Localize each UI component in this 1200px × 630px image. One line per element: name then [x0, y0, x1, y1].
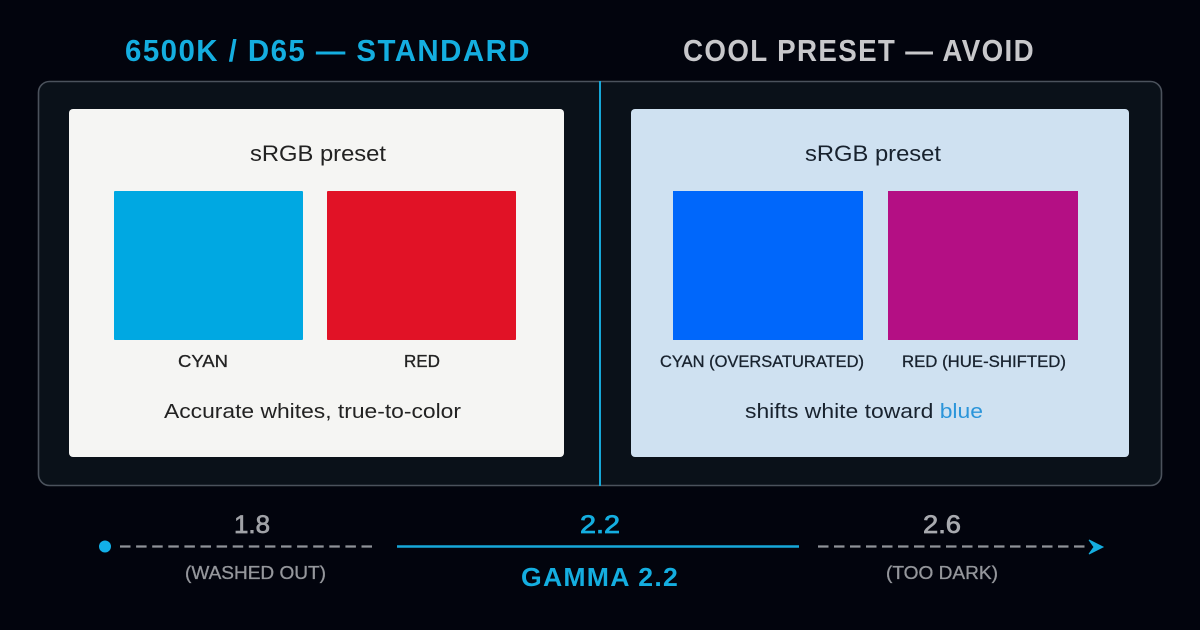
swatch: red — [327, 191, 516, 340]
value: 2.6: 2.6 — [923, 511, 961, 539]
panel: cool preset — [631, 109, 1129, 457]
label: gamma 2.2: GAMMA 2.2 — [521, 562, 679, 592]
label: cyan oversaturated: CYAN (OVERSATURATED) — [660, 352, 864, 371]
value: 1.8: 1.8 — [234, 511, 270, 539]
arrowhead — [1089, 540, 1103, 554]
center divider — [599, 81, 601, 486]
card heading: sRGB preset: sRGB preset — [805, 141, 942, 166]
title: cool preset avoid: COOL PRESET — AVOID — [683, 34, 1035, 68]
title: 6500K standard: 6500K / D65 — STANDARD — [125, 34, 531, 68]
panel: standard — [69, 109, 564, 457]
gamma scale — [99, 511, 1103, 592]
start dot — [99, 540, 111, 552]
comparison frame — [38, 82, 1162, 486]
swatch: oversaturated cyan — [673, 191, 863, 340]
swatch: hue-shifted red — [888, 191, 1078, 340]
solid line: gamma 2.2 — [397, 545, 799, 548]
note: too dark: (TOO DARK) — [886, 562, 998, 583]
label: red hue-shifted: RED (HUE-SHIFTED) — [902, 352, 1066, 371]
dashed line: low gamma — [120, 545, 372, 548]
caption: shifts white toward blue: shifts white toward blue — [745, 401, 983, 423]
label: red: RED — [404, 351, 440, 371]
caption: accurate whites: Accurate whites, true-to-color — [164, 401, 461, 423]
swatch: cyan — [114, 191, 303, 340]
dashed line: high gamma — [818, 545, 1090, 548]
card heading: sRGB preset: sRGB preset — [250, 141, 387, 166]
label: cyan: CYAN — [178, 351, 228, 371]
card background: neutral white — [69, 109, 564, 457]
value: 2.2: 2.2 — [580, 511, 620, 539]
note: washed out: (WASHED OUT) — [185, 562, 326, 583]
card background: bluish white — [631, 109, 1129, 457]
